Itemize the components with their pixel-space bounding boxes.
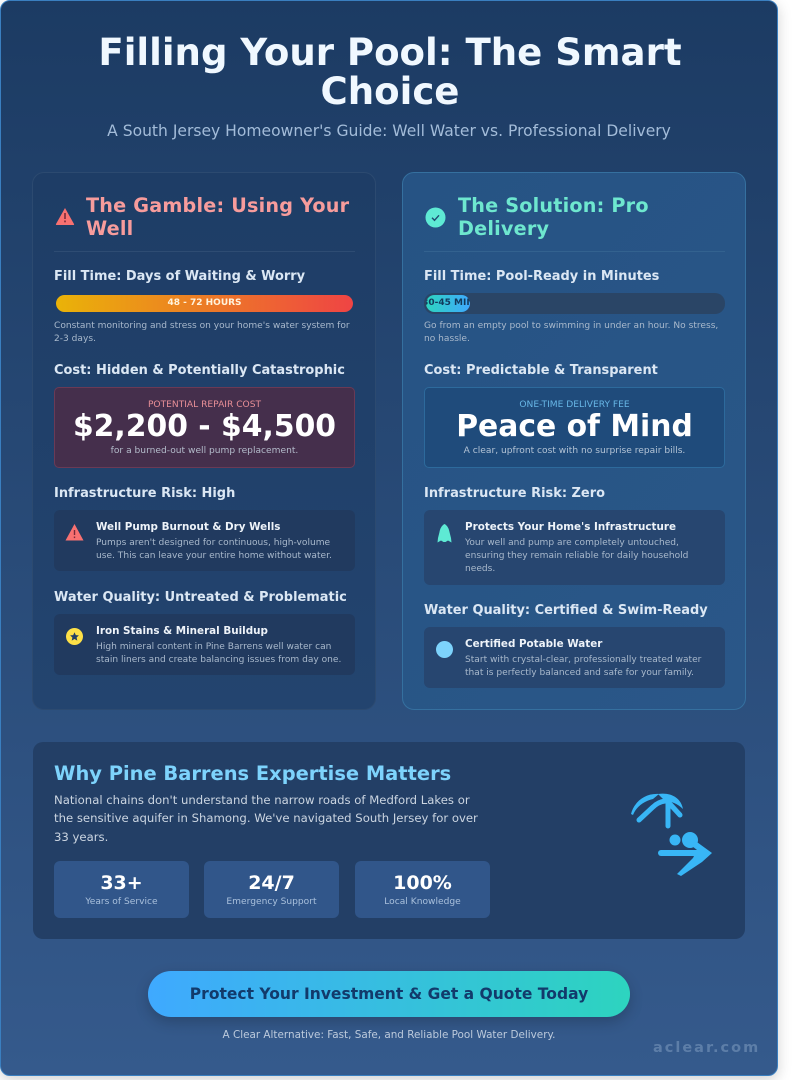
cost callout (54, 387, 355, 468)
water quality heading: Water Quality: Certified & Swim-Ready (424, 603, 708, 618)
fill time description (54, 321, 350, 344)
water quality box: Start with crystal-clear, professionally treated water (465, 655, 701, 665)
footer text: A Clear Alternative: Fast, Safe, and Reliable Pool Water Delivery. (223, 1029, 555, 1041)
gamble heading (86, 194, 350, 240)
cost note: for a burned-out well pump replacement. (111, 446, 298, 456)
watermark: aclear.com (653, 1040, 760, 1056)
water quality box (54, 614, 355, 675)
bar: 48-72 hours (56, 295, 353, 312)
infrastructure text: Protects Your Home's Infrastructure (465, 521, 676, 533)
panel: the solution (402, 172, 746, 710)
fill time heading: Fill Time: Days of Waiting & Worry (54, 269, 305, 284)
fill time description: Constant monitoring and stress on your home's water system for (54, 321, 350, 331)
cost label: POTENTIAL REPAIR COST (148, 400, 261, 410)
fill time heading: Fill Time: Pool-Ready in Minutes (424, 269, 659, 284)
gamble heading: Well (86, 217, 133, 240)
infrastructure box (54, 510, 355, 571)
gamble heading: The Gamble: Using Your (86, 194, 349, 217)
solution heading: Delivery (458, 217, 549, 240)
stat: years: 33+ (100, 872, 143, 894)
stat: local (355, 861, 490, 918)
cost heading: Cost: Predictable & Transparent (424, 363, 658, 378)
cost label: ONE-TIME DELIVERY FEE (519, 400, 630, 410)
fill time description (424, 321, 718, 344)
expertise text: National chains don't understand the narrow roads of Medford Lakes or (54, 793, 470, 807)
cost note: A clear, upfront cost with no surprise repair bills. (464, 446, 685, 456)
fill time description: 2-3 days. (54, 334, 96, 344)
title (98, 31, 682, 113)
water quality box: that is perfectly balanced and safe for your family. (465, 668, 694, 678)
panel: the gamble (32, 172, 376, 710)
water quality box (424, 627, 725, 688)
bar: 48-72 hours: 48 - 72 HOURS (167, 298, 242, 308)
bar fill (426, 295, 470, 312)
icon: shield (438, 524, 452, 542)
stat: local: Local Knowledge (384, 897, 461, 907)
gamble heading divider (54, 251, 355, 252)
stat: years (54, 861, 189, 918)
stat: emergency (204, 861, 339, 918)
infrastructure box: Pumps aren't designed for continuous, high-volume (96, 538, 330, 548)
cost value: $2,200 - $4,500 (73, 409, 336, 444)
bar: 30-45 min (424, 293, 725, 314)
icon: warning (66, 524, 84, 540)
cta button: Protect Your Investment & Get a Quote Today (190, 985, 588, 1003)
icon: warning (56, 208, 74, 225)
stat: years: Years of Service (85, 897, 158, 907)
infrastructure heading: Infrastructure Risk: Zero (424, 486, 605, 501)
cta button (148, 971, 630, 1017)
icon: droplet (436, 641, 453, 658)
cost heading: Cost: Hidden & Potentially Catastrophic (54, 363, 345, 378)
title: Filling Your Pool: The Smart (98, 31, 682, 74)
expertise text: 33 years. (54, 830, 108, 844)
subtitle: A South Jersey Homeowner's Guide: Well Water vs. Professional Delivery (107, 122, 671, 140)
water quality text: Certified Potable Water (465, 638, 602, 650)
stat: emergency: 24/7 (248, 872, 295, 894)
fill time description: no hassle. (424, 334, 470, 344)
water quality text: Iron Stains & Mineral Buildup (96, 625, 268, 637)
title: Choice (321, 70, 459, 113)
water quality box: High mineral content in Pine Barrens well water can (96, 642, 331, 652)
icon: star badge (66, 628, 83, 645)
icon: check (426, 208, 446, 228)
expertise heading: Why Pine Barrens Expertise Matters (54, 762, 451, 785)
panel: why pine barrens (33, 742, 745, 939)
icon: palm tree and swimmer (631, 794, 712, 876)
solution heading: The Solution: Pro (458, 194, 649, 217)
water quality heading: Water Quality: Untreated & Problematic (54, 590, 347, 605)
infrastructure box: use. This can leave your entire home without water. (96, 551, 332, 561)
stat: emergency: Emergency Support (226, 897, 317, 907)
infrastructure box: ensuring they remain reliable for daily household (465, 551, 688, 561)
stat: local: 100% (393, 872, 452, 894)
infrastructure box: Your well and pump are completely untouched, (465, 538, 679, 548)
fill time description: Go from an empty pool to swimming in under an hour. No stress, (424, 321, 718, 331)
infrastructure box (424, 510, 725, 585)
cost value: Peace of Mind (456, 409, 693, 444)
expertise text: the sensitive aquifer in Shamong. We've navigated South Jersey for over (54, 811, 478, 825)
infrastructure heading: Infrastructure Risk: High (54, 486, 235, 501)
solution heading divider (424, 251, 725, 252)
solution heading (458, 194, 649, 240)
infrastructure text: Well Pump Burnout & Dry Wells (96, 521, 280, 533)
expertise text (54, 793, 478, 844)
infrastructure box: needs. (465, 564, 495, 574)
water quality box: stain liners and create balancing issues from day one. (96, 655, 341, 665)
cost callout (424, 387, 725, 468)
